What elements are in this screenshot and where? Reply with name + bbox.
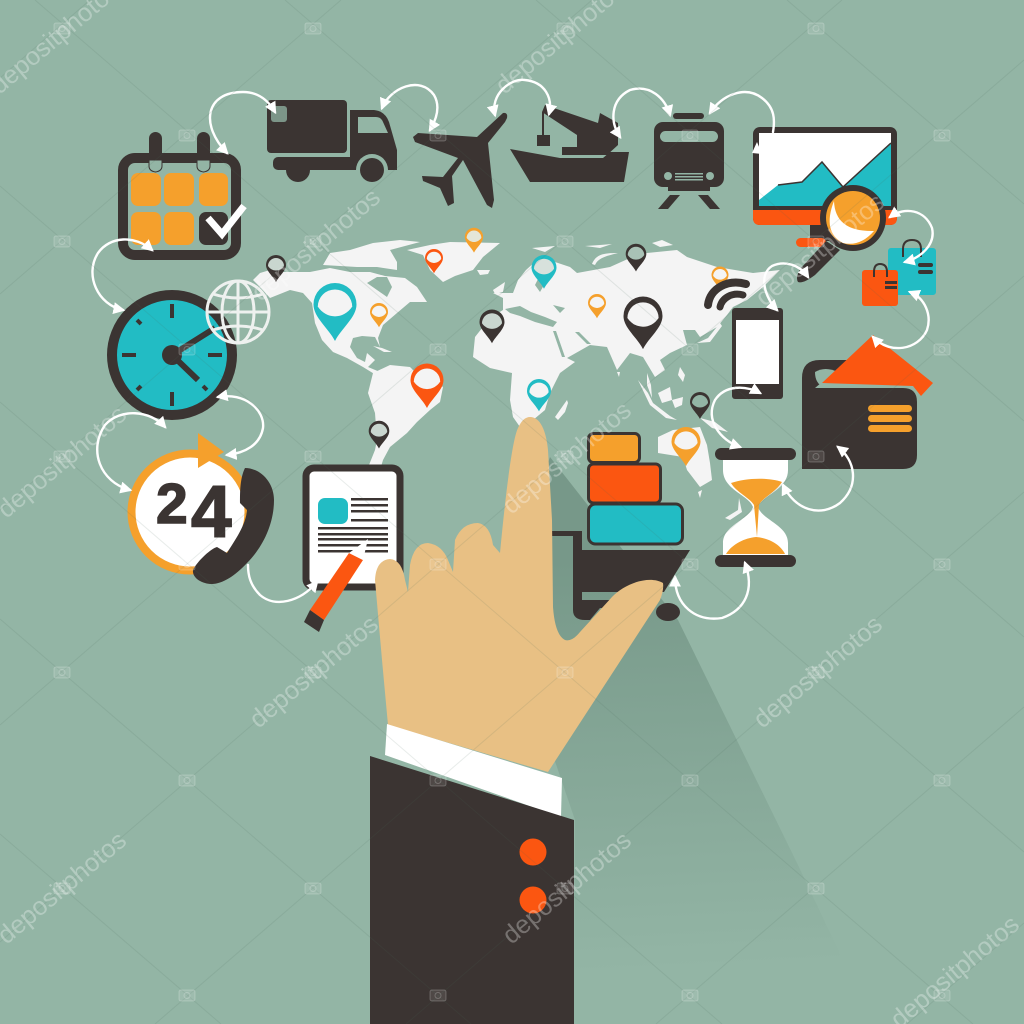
Madagascar [555,400,568,420]
pin orange East Asia [712,266,728,289]
icon: folder with orange house flap [802,335,933,469]
pin orange Asia [588,294,606,318]
arrow monitor to bags [890,211,933,262]
icon: 24 hour support [132,433,274,584]
arrow 24 to clock [218,396,263,455]
Malay peninsula and Sumatra [638,373,677,420]
suit sleeve [370,756,574,1024]
icon: delivery truck [267,100,397,182]
arrow plane to ship [494,80,550,115]
icon: airplane [413,113,507,208]
icon: globe [207,281,269,343]
New Guinea [700,418,728,432]
New Zealand [725,498,742,520]
icon: cargo ship with crane [510,105,629,182]
Greenland [407,242,500,282]
pin orange Greenland [465,228,483,253]
arrow calendar to truck [210,92,275,153]
pin orange Australia [672,427,700,466]
pin red South America [410,364,444,408]
pin dark South America [369,421,389,449]
telephone receiver [193,468,274,584]
watermark text: depositphotos [748,610,888,734]
hand pointing [375,417,663,772]
watermark text: depositphotos [246,183,386,307]
button [520,838,546,866]
icon: shopping cart with boxes [552,434,690,621]
Novaya Zemlya [592,253,618,265]
Philippines [672,367,685,408]
icon: wifi signal [708,283,746,307]
North America [253,268,427,375]
white shirt cuff [385,724,562,817]
icon: calendar [123,132,244,255]
watermark text: depositphotos [497,396,637,520]
Iceland [477,270,490,275]
arrowhead on monitor [752,142,762,154]
icon: shopping bags [862,240,936,306]
icon: train [654,113,724,209]
icon: hourglass [715,448,796,567]
pin teal Africa [527,379,551,411]
icon: tablet document with pencil [304,468,400,632]
Japan [697,323,722,343]
pencil [304,539,368,632]
arrow calendar to clock [92,239,152,310]
Britain [493,282,505,294]
box teal [588,504,682,544]
Borneo [658,387,672,403]
Siberian islands [585,240,673,248]
Hudson bay [367,277,392,297]
pin orange USA [370,303,388,327]
arrow ship to train [613,89,670,137]
box red [588,464,660,503]
arrow folder to hourglass [783,447,853,511]
pin dark Russia [626,244,646,272]
pin red Greenland [425,249,443,273]
watermark text: depositphotos [244,610,384,734]
label 24: 4 [191,472,232,553]
label 24: 2 [156,472,188,536]
arrow magnifier to phone [764,263,808,310]
Eurasia and Africa [473,250,780,427]
world map [253,240,780,520]
South America [367,365,443,470]
Australia [658,427,712,487]
button [520,886,546,914]
Baltic and Black Sea [535,275,565,313]
Cuba [373,346,392,352]
Arctic islands [323,240,420,270]
Tasmania [698,490,702,498]
Mediterranean [505,306,557,327]
pin dark Alaska [266,255,286,282]
watermark text: depositphotos [750,188,890,312]
watermark text: depositphotos [497,826,637,950]
Sri Lanka [617,372,620,377]
icon: monitor with chart and magnifier [753,127,897,282]
arrow train to monitor [710,92,774,132]
connecting arrows [92,80,933,619]
long shadow of hand [500,457,850,1000]
Svalbard [532,246,555,252]
icon: smartphone [732,308,783,399]
arrow hourglass to cart [675,563,749,619]
box orange [588,434,640,462]
arrow truck to plane [382,85,437,130]
pin dark Atlantic [480,310,504,343]
arrow bags to house [873,292,929,348]
pin dark Indonesia [690,392,710,419]
pin teal USA [314,283,356,341]
arrow phone to hourglass [712,388,760,447]
Red Sea and Persian Gulf [553,331,591,357]
magnifier [797,185,886,282]
arrow tablet to phone [248,565,317,602]
pin dark large Asia [624,296,662,349]
icon: clock [112,295,232,415]
map pins [266,228,728,466]
pin teal Scandinavia [532,255,556,289]
arrow clock to 24 [97,413,165,490]
